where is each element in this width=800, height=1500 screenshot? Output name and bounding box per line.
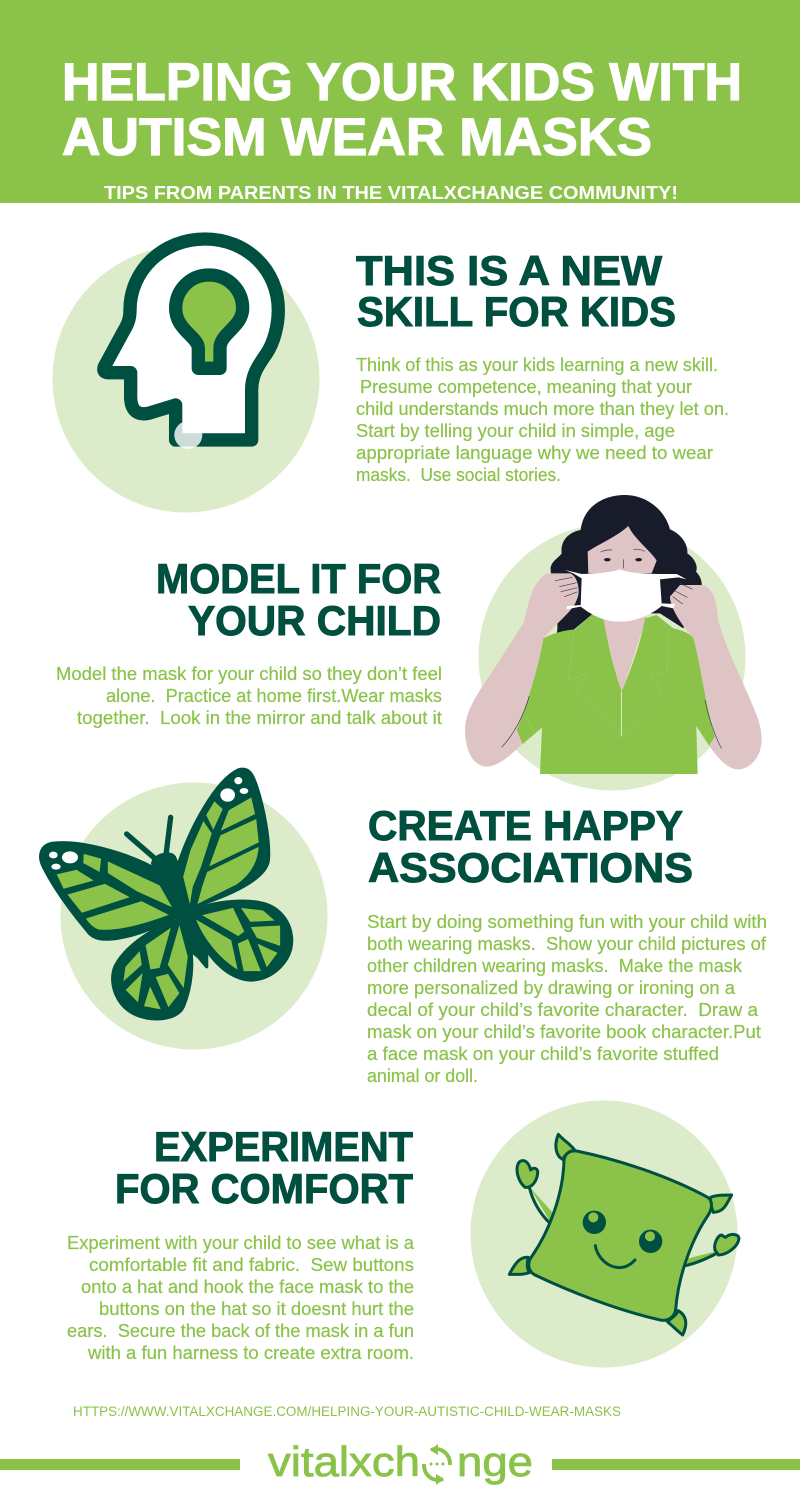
panel: happy associations bbox=[41, 769, 767, 1086]
title: HELPING YOUR KIDS WITH bbox=[62, 53, 742, 112]
heading: happy associations bbox=[368, 802, 693, 891]
text block: experiment: buttons on the hat so it doesnt hurt the bbox=[99, 1299, 414, 1319]
illustration: smiling pillow bbox=[470, 1100, 739, 1368]
text block: new skill: Think of this as your kids learning a new skill. bbox=[356, 355, 718, 375]
heading: experiment bbox=[115, 1123, 413, 1212]
heading: model it: YOUR CHILD bbox=[188, 597, 441, 644]
text block: happy associations: both wearing masks. Show your child pictures of bbox=[367, 934, 767, 954]
text block: experiment: Experiment with your child to see what is a bbox=[67, 1233, 415, 1253]
text block: model it: Model the mask for your child so they don’t feel bbox=[56, 664, 442, 684]
text block: happy associations: mask on your child’s favorite book character.Put bbox=[367, 1022, 761, 1042]
text block: model it: together. Look in the mirror and talk about it bbox=[77, 708, 442, 728]
heading: new skill: SKILL FOR KIDS bbox=[357, 288, 676, 335]
text block: model it bbox=[56, 664, 442, 728]
text block: experiment: comfortable fit and fabric. Sew buttons bbox=[89, 1255, 414, 1275]
illustration: woman putting on mask bbox=[465, 495, 762, 790]
panel: new skill bbox=[52, 239, 729, 512]
text block: model it: alone. Practice at home first.Wear masks bbox=[106, 686, 442, 706]
text block: experiment bbox=[67, 1233, 415, 1363]
footer logo with rules: nge bbox=[457, 1438, 533, 1485]
illustration: butterfly bbox=[41, 769, 328, 1050]
title: AUTISM WEAR MASKS bbox=[62, 108, 652, 167]
text block: new skill: appropriate language why we need to wear bbox=[356, 443, 713, 463]
text block: new skill: masks. Use social stories. bbox=[356, 465, 561, 485]
header banner bbox=[0, 0, 800, 203]
text block: new skill: child understands much more than they let on. bbox=[356, 399, 729, 419]
title bbox=[62, 53, 742, 167]
text block: happy associations: animal or doll. bbox=[367, 1066, 478, 1086]
text block: new skill: Start by telling your child in simple, age bbox=[356, 421, 675, 441]
text block: experiment: onto a hat and hook the face mask to the bbox=[81, 1277, 414, 1297]
text block: happy associations: a face mask on your child’s favorite stuffed bbox=[367, 1044, 719, 1064]
text block: happy associations: Start by doing something fun with your child with bbox=[367, 912, 767, 932]
text block: happy associations: other children wearing masks. Make the mask bbox=[367, 956, 743, 976]
icon: head with light bulb bbox=[52, 239, 320, 512]
heading: new skill: THIS IS A NEW bbox=[356, 247, 662, 294]
text block: happy associations: more personalized by drawing or ironing on a bbox=[367, 978, 736, 998]
text block: experiment: ears. Secure the back of the mask in a fun bbox=[67, 1321, 414, 1341]
text block: experiment: with a fun harness to create extra room. bbox=[87, 1343, 414, 1363]
text block: new skill: Presume competence, meaning that your bbox=[360, 377, 692, 397]
heading: experiment: EXPERIMENT bbox=[154, 1123, 413, 1170]
heading: experiment: FOR COMFORT bbox=[115, 1165, 413, 1212]
source url: HTTPS://WWW.VITALXCHANGE.COM/HELPING-YOUR-AUTISTIC-CHILD-WEAR-MASKS bbox=[73, 1404, 621, 1419]
text block: new skill bbox=[356, 355, 729, 485]
heading: model it bbox=[156, 555, 441, 644]
text block: happy associations: decal of your child’s favorite character. Draw a bbox=[367, 1000, 759, 1020]
panel: model it bbox=[56, 495, 762, 790]
panel: experiment for comfort bbox=[67, 1100, 739, 1368]
text block: happy associations bbox=[367, 912, 767, 1086]
footer logo with rules bbox=[0, 1438, 800, 1485]
heading: happy associations: ASSOCIATIONS bbox=[368, 844, 693, 891]
heading: happy associations: CREATE HAPPY bbox=[368, 802, 683, 849]
heading: new skill bbox=[356, 247, 676, 335]
subtitle: TIPS FROM PARENTS IN THE VITALXCHANGE COMMUNITY! bbox=[104, 182, 678, 203]
footer logo with rules: vitalxch bbox=[268, 1438, 420, 1485]
heading: model it: MODEL IT FOR bbox=[156, 555, 441, 602]
